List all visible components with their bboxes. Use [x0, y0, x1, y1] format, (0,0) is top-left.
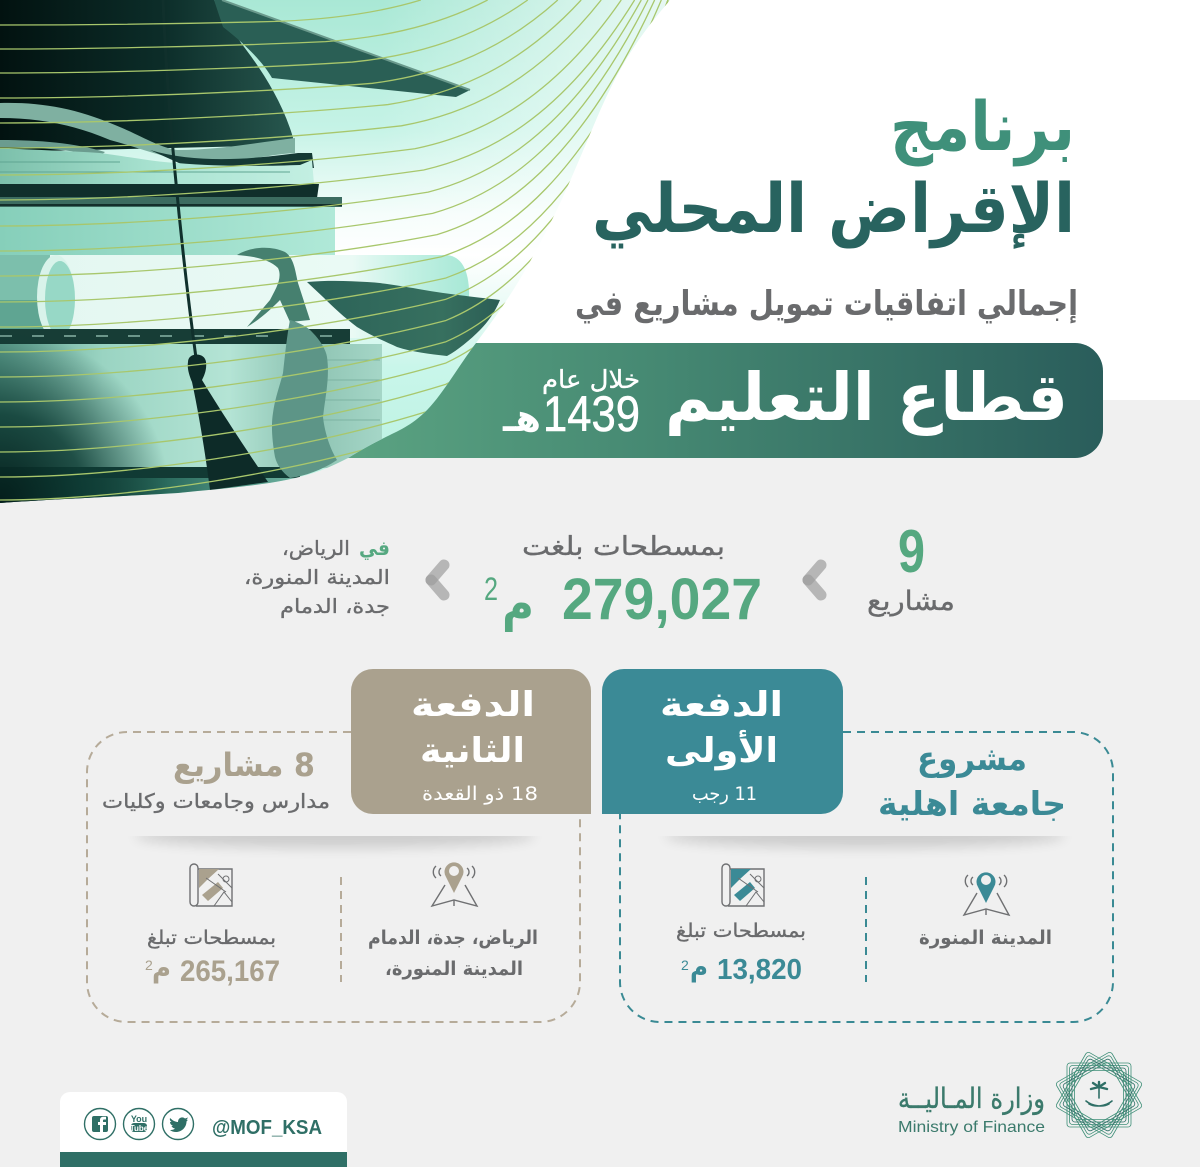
banner year: 1439 — [543, 386, 640, 442]
banner sub label: خلال عام — [542, 365, 640, 394]
area text: م — [152, 953, 171, 984]
dashed frame — [620, 732, 1113, 1022]
title line 1: برنامج — [890, 88, 1075, 167]
icon: scroll map — [190, 864, 232, 906]
cap band — [0, 103, 295, 163]
panel: first batch — [602, 669, 1113, 1022]
area text: بمسطحات تبلغ — [147, 927, 276, 949]
tab: الدفعة — [660, 685, 783, 725]
icon: youtube: Tube — [130, 1124, 149, 1133]
curved lines — [0, 0, 669, 501]
stat: total area: م — [502, 576, 534, 632]
stat: project count — [867, 518, 955, 617]
stat: project count: مشاريع — [867, 586, 955, 617]
stat: cities: في — [359, 536, 390, 561]
tab: الأولى — [665, 729, 778, 771]
dark corner shading — [0, 344, 162, 503]
stat: total area: 279,027 — [562, 567, 762, 632]
area text: 2 — [145, 957, 153, 973]
divider — [340, 877, 342, 982]
cities text: المدينة المنورة، — [385, 958, 523, 980]
area text: 13,820 — [717, 954, 802, 986]
social card — [60, 1092, 347, 1167]
bottom pages — [0, 478, 295, 503]
area text: بمسطحات تبلغ — [676, 920, 806, 942]
shelf shadow — [138, 836, 532, 852]
stat: total area: 2 — [484, 571, 498, 607]
tab — [351, 669, 591, 814]
middle book — [0, 207, 335, 257]
ribbon tail — [307, 281, 500, 356]
area text — [676, 920, 806, 986]
stat: cities: الرياض، — [282, 536, 350, 560]
stat: total area — [484, 532, 762, 632]
cap cord — [171, 148, 197, 355]
stat: project count: 9 — [898, 518, 925, 585]
logo arabic name: وزارة المـاليــة — [898, 1082, 1045, 1115]
logo: ministry of finance — [898, 1051, 1143, 1139]
ribbon knot — [237, 248, 310, 327]
ribbon drop — [272, 320, 337, 478]
area text: 265,167 — [180, 955, 280, 988]
tab: الثانية — [420, 731, 525, 771]
heading: 8 projects — [102, 746, 330, 813]
tassel — [188, 354, 268, 490]
tab — [602, 669, 843, 814]
banner year: هـ — [502, 396, 541, 440]
scroll — [50, 255, 469, 338]
heading: 8 projects: 8 مشاريع — [173, 746, 315, 784]
banner: education sector — [300, 343, 1103, 458]
area text — [145, 927, 280, 988]
stat: total area: بمسطحات بلغت — [522, 532, 725, 562]
palm and swords — [1086, 1082, 1112, 1106]
cap board — [214, 0, 470, 97]
title — [592, 88, 1075, 249]
dark wedge over top book — [150, 150, 314, 168]
area text: 2 — [681, 957, 689, 973]
icon: map pin — [964, 872, 1009, 915]
handle: @MOF_KSA — [212, 1117, 322, 1139]
lower book pages — [0, 344, 382, 468]
subtitle: إجمالي اتفاقيات تمويل مشاريع في — [575, 284, 1078, 324]
icon: map pin — [432, 862, 477, 906]
area text: م — [690, 952, 708, 983]
icon: scroll map — [722, 864, 764, 906]
top book — [0, 148, 314, 184]
cities text: الرياض، جدة، الدمام — [368, 927, 538, 949]
background lower grey — [0, 400, 1200, 1167]
heading: 8 projects: مدارس وجامعات وكليات — [102, 789, 330, 813]
book covers — [0, 184, 319, 198]
icon: twitter — [162, 1108, 194, 1140]
logo english name: Ministry of Finance — [898, 1119, 1045, 1136]
lower book cover — [0, 329, 350, 344]
cities text — [368, 927, 538, 980]
city text: المدينة المنورة — [919, 927, 1052, 949]
scroll end — [37, 255, 74, 329]
photo: graduation cap, books and scroll — [0, 0, 670, 503]
icon: facebook — [84, 1108, 116, 1140]
bottom book edge — [0, 467, 300, 478]
divider — [865, 877, 867, 982]
heading: private university project: جامعة اهلية — [878, 784, 1066, 823]
left stack edge — [0, 255, 50, 300]
banner heading: قطاع التعليم — [665, 359, 1068, 436]
dashed frame — [87, 732, 580, 1022]
arrow: chevron right — [808, 565, 821, 595]
heading: private university project — [878, 739, 1066, 823]
stat: cities: المدينة المنورة، — [244, 565, 390, 589]
icon: youtube — [124, 1108, 154, 1140]
tab: 18 ذو القعدة — [422, 783, 538, 805]
shelf shadow — [668, 836, 1062, 852]
logo emblem — [1055, 1051, 1143, 1139]
icon: youtube: You — [131, 1114, 147, 1124]
title line 2: الإقراض المحلي — [592, 170, 1075, 249]
heading: private university project: مشروع — [917, 739, 1027, 779]
stat: cities: جدة، الدمام — [280, 594, 390, 618]
banner year — [502, 386, 640, 442]
background top white — [0, 0, 1200, 400]
tab: 11 رجب — [692, 783, 757, 805]
panel: second batch — [87, 669, 591, 1022]
cap dome — [0, 0, 295, 152]
stat: cities — [244, 536, 390, 618]
tab: الدفعة — [411, 685, 535, 725]
arrow: chevron left — [431, 565, 444, 595]
